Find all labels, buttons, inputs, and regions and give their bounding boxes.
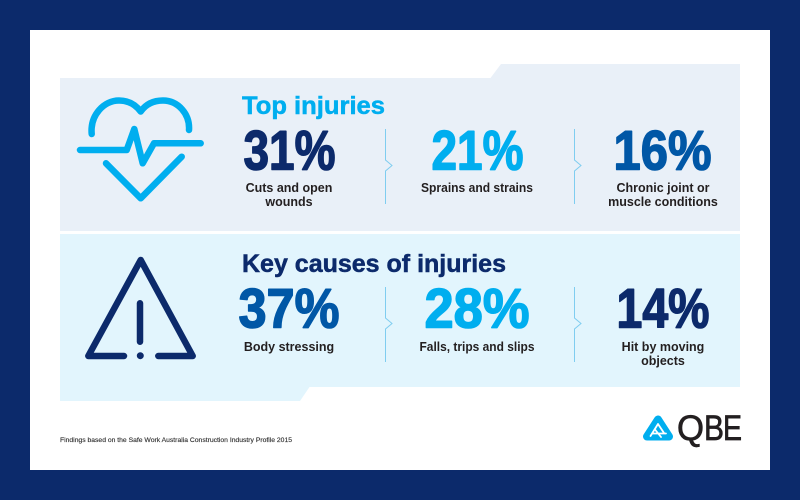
heading: top injuries: Top injuries [242, 92, 385, 120]
divider with chevron [574, 287, 581, 362]
label: sprains and strains: Sprains and strains [421, 181, 533, 195]
icon: warning triangle [88, 260, 193, 357]
stat: 31%: 31% [244, 120, 336, 182]
logo symbol [647, 420, 669, 437]
stat: 37%: 37% [238, 278, 340, 340]
divider with chevron [386, 287, 392, 362]
logo wordmark [677, 409, 742, 448]
logo wordmark: Q [677, 409, 704, 448]
label: hit by moving objects: objects [641, 354, 685, 368]
heading: key causes of injuries: Key causes of injuries [242, 250, 506, 278]
label: falls, trips and slips: Falls, trips and slips [420, 340, 535, 354]
stat: 16%: 16% [614, 120, 712, 182]
label: body stressing: Body stressing [244, 340, 334, 354]
label: chronic joint or muscle conditions: Chronic joint or [616, 181, 710, 195]
icon: heart with pulse [80, 100, 201, 198]
label: hit by moving objects: Hit by moving [622, 340, 704, 354]
logo wordmark: B [704, 409, 724, 448]
divider with chevron [574, 129, 581, 204]
logo wordmark: E [723, 409, 742, 448]
stat: 21%: 21% [432, 120, 524, 182]
label: cuts and open wounds: wounds [264, 195, 313, 209]
panel: key causes of injuries [60, 234, 740, 401]
stat: 28%: 28% [424, 278, 530, 340]
panel background [60, 64, 740, 231]
label: cuts and open wounds: Cuts and open [246, 181, 332, 195]
QBE logo [647, 409, 742, 448]
stat: 14%: 14% [616, 278, 710, 340]
footnote: Findings based on the Safe Work Australia Construction Industry Profile 2015 [60, 437, 292, 444]
divider with chevron [386, 129, 392, 204]
label: chronic joint or muscle conditions: muscle conditions [608, 195, 718, 209]
panel background [60, 234, 740, 401]
panel: top injuries [60, 64, 740, 231]
